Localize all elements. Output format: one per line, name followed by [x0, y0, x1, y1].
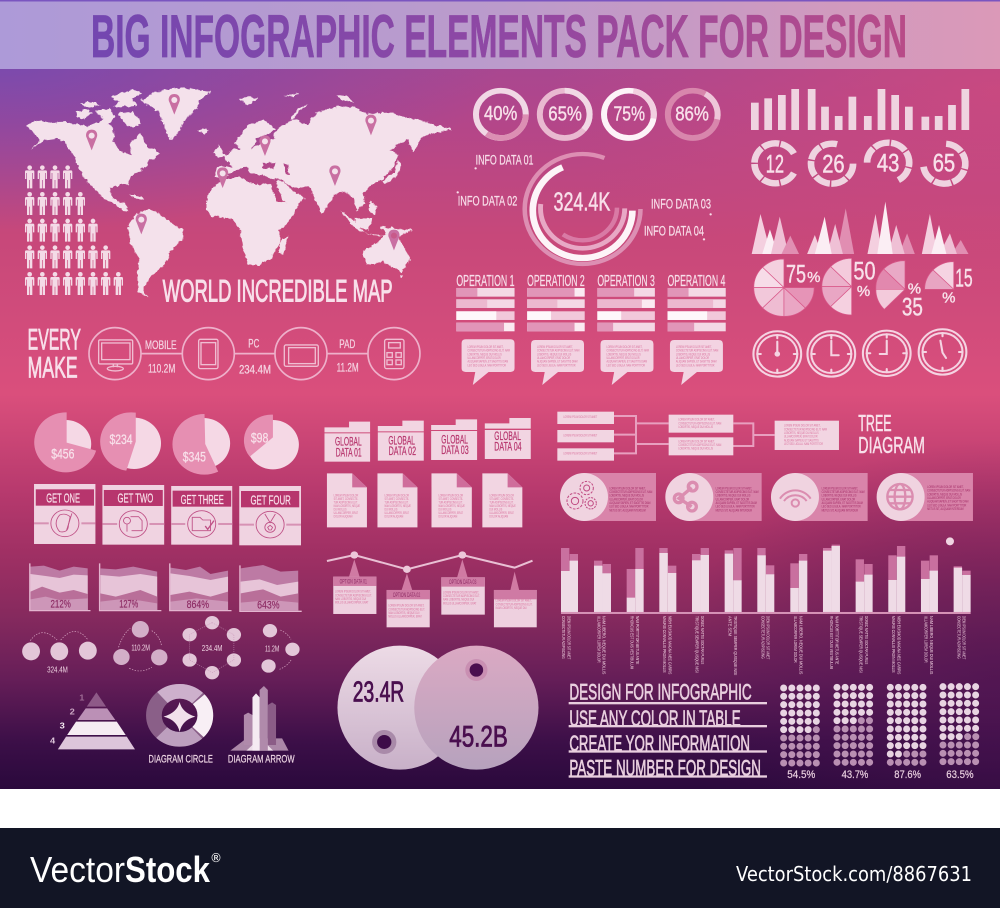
- title band: [0, 0, 1000, 70]
- speech bubbles: LEO SED LIGULA. NAM PORTTITOR: [606, 363, 645, 367]
- option data timeline: OPTION DATA 03: [449, 579, 477, 586]
- arc chart labels: INFO DATA 04: [644, 224, 704, 239]
- percent donuts: [476, 82, 727, 147]
- map location pins: [86, 94, 400, 250]
- gauge values: 43: [877, 148, 899, 178]
- icon feature row: ALIQUAM SAPIEN, ET SAGITTIS DIAM: [609, 500, 651, 505]
- circle groups: 110.2M: [131, 644, 150, 653]
- device connector chain: [89, 328, 420, 380]
- pie percent labels: 15: [955, 265, 973, 292]
- document sheets: TUR ADIPISCING ELIT.: [384, 500, 409, 505]
- icon feature row: LEO SED LIGULA. NAM PORTTITOR: [927, 503, 966, 508]
- speech bubbles: ALIQUAM SAPIEN, ET SAGITTIS DIAM: [537, 359, 578, 364]
- tree diagram: CONSECTETUR ADIPISCING ELIT. NAM: [784, 427, 827, 432]
- rotated bar labels: DONEC MATTIS SOCTAR PURUS: [864, 616, 869, 664]
- option data timeline: MOLLIS ULLAMCORPER, ERAT: [443, 601, 477, 605]
- panel: center top charts: [456, 82, 973, 385]
- pyramid diagram: 4: [50, 736, 55, 745]
- footer image id: VectorStock.com/8867631: [736, 862, 972, 886]
- rotated bar labels: CONSECTETUR ADIPISCING: [760, 616, 765, 659]
- design list: PASTE NUMBER FOR DESIGN: [569, 755, 761, 780]
- every make heading: EVERY: [28, 323, 81, 356]
- icon feature row: ALIQUAM SAPIEN, ET SAGITTIS DIAM: [822, 500, 863, 505]
- dot matrix values: 87.6%: [894, 769, 921, 781]
- document sheets: NAM LOBORTIS, NEQUE: [334, 504, 360, 508]
- document sheets: NAM LOBORTIS, NEQUE: [489, 504, 516, 508]
- global data folders: GLOBAL: [388, 434, 415, 447]
- donut values: 86%: [675, 103, 709, 126]
- option data timeline: [327, 551, 537, 627]
- operation bars: OPERATION 3: [597, 273, 655, 290]
- icon feature row: METUS SIT, ALIQUAM INTERDUM: [716, 508, 752, 513]
- donut values: 75%: [613, 103, 645, 126]
- document sheets: SIT AMET, CONSECTE-: [334, 497, 358, 501]
- tree diagram: ULLAMCORPER, ERAT DOLOR: [784, 434, 818, 439]
- speech bubbles: LOBORTIS, NEQUE DUI MOLLIS: [606, 352, 641, 356]
- icon: share: [674, 482, 697, 511]
- money pie charts: $234: [109, 432, 133, 448]
- get cards: GET FOUR: [250, 493, 291, 507]
- tree diagram: LOREM IPSUM DOLOR SIT AMET,: [678, 417, 715, 422]
- speech bubbles: LOREM IPSUM DOLOR SIT AMET,: [606, 344, 642, 349]
- stacked area charts: 864%: [187, 598, 209, 611]
- document sheets: LOREM IPSUM DOLOR: [384, 493, 409, 498]
- document sheets: DUI MOLLIS: [334, 507, 347, 512]
- panel: lower left set: [30, 412, 537, 627]
- overlapping value circles: [337, 646, 539, 770]
- speech bubbles: CONSECTETUR ADIPISCING ELIT. NAM: [468, 348, 510, 353]
- rotated bar labels: DIEM IPSUM DOLOR SIT AMET: [766, 616, 771, 659]
- diagram circle: [143, 681, 216, 766]
- document sheets: DOLOR ALIQUAM: [489, 514, 509, 519]
- gauge values: 65: [933, 148, 955, 178]
- speech bubbles: CONSECTETUR ADIPISCING ELIT. NAM: [537, 348, 580, 353]
- overlapping value circles: 45.2B: [449, 720, 508, 753]
- icon feature row: LOREM IPSUM DOLOR SIT AMET,: [716, 486, 752, 491]
- icon feature row: LOBORTIS, NEQUE DUI MOLLIS: [927, 492, 962, 497]
- rotated bar labels: DIEM IPSUM DOLOR SIT AMET: [962, 616, 967, 659]
- tree diagram heading: [858, 410, 925, 458]
- speech bubbles: ULLAMCORPER, ERAT DOLOR: [537, 355, 570, 360]
- every make heading: [28, 323, 81, 384]
- segmented pie charts: [754, 258, 954, 316]
- rotated bar labels: TRISTIQUE SEMPER QUISQUE NISI: [733, 616, 738, 675]
- rotated bar labels: NAM PORTTITOR METUS ANTE: [635, 616, 640, 664]
- rotated bar labels: NIBH EUISMOD MAGNA NEC CARPIS: [667, 616, 672, 674]
- operation bars: [456, 273, 726, 331]
- map heading: WORLD INCREDIBLE MAP: [163, 274, 393, 309]
- document sheets: DOLOR ALIQUAM: [334, 514, 353, 519]
- donut values: 65%: [548, 103, 582, 126]
- tree diagram: LOREM IPSUM DOLOR SIT AMET,: [784, 423, 820, 428]
- icon feature row: LOREM IPSUM DOLOR SIT AMET,: [927, 484, 964, 489]
- speech bubbles: CONSECTETUR ADIPISCING ELIT. NAM: [676, 348, 719, 353]
- pie percent labels: [786, 258, 973, 321]
- speech bubbles: LEO SED LIGULA. NAM PORTTITOR: [468, 363, 506, 367]
- tree diagram: LOBORTIS, NEQUE DUI MOLLIS: [678, 424, 713, 429]
- tree diagram: LOBORTIS, NEQUE DUI MOLLIS: [784, 430, 819, 435]
- icon feature row: ALIQUAM SAPIEN, ET SAGITTIS DIAM: [927, 499, 969, 504]
- money pie charts: $98: [251, 431, 268, 446]
- overlapping value circles: 23.4R: [353, 677, 404, 708]
- rotated bar labels: MAURIS CONVALLIS PROIN MOLLIS: [891, 616, 896, 673]
- document sheets: SIT AMET, CONSECTE-: [439, 497, 463, 501]
- footer bar: [0, 828, 1000, 908]
- device labels: 234.4M: [239, 362, 271, 376]
- icon feature row: CONSECTETUR ADIPISCING ELIT. NAM: [822, 489, 865, 494]
- document sheets: NAM LOBORTIS, NEQUE: [439, 504, 465, 508]
- speech bubbles: ALIQUAM SAPIEN, ET SAGITTIS DIAM: [676, 359, 717, 364]
- speech bubbles: [462, 339, 723, 385]
- tree diagram: LOREM IPSUM DOLOR SIT AMET: [563, 451, 597, 456]
- circle groups: 11.2M: [265, 645, 279, 653]
- gauge values: 12: [766, 149, 784, 178]
- global data folders: GLOBAL: [441, 433, 468, 446]
- document sheets: ULLAMCORPER, ERAT: [439, 511, 463, 515]
- design list: CREATE YOR INFORMATION: [569, 731, 750, 756]
- speech bubbles: LEO SED LIGULA. NAM PORTTITOR: [676, 363, 714, 367]
- panel: bottom right design list and dots: [569, 679, 977, 781]
- clocks: [753, 329, 966, 377]
- tree diagram: [557, 410, 925, 461]
- design list: DESIGN FOR INFOGRAPHIC: [569, 679, 752, 704]
- circle groups: 234.4M: [202, 644, 223, 653]
- design list: USE ANY COLOR IN TABLE: [569, 706, 741, 731]
- option data timeline: CONSECTETUR ADIPISCING ELIT.: [443, 593, 480, 598]
- document sheets: DOLOR ALIQUAM: [384, 514, 404, 519]
- circle groups: [22, 616, 300, 679]
- concentric arc chart: [525, 154, 640, 264]
- option data timeline: LOREM IPSUM DOLOR SIT AMET,: [388, 603, 424, 608]
- icon feature row: ULLAMCORPER, ERAT DOLOR: [609, 497, 643, 502]
- every make heading: MAKE: [28, 351, 78, 384]
- option data timeline: CONSECTETUR ADIPISCING ELIT.: [496, 602, 533, 606]
- icon: globe: [887, 484, 913, 509]
- footer logo: ®: [210, 851, 222, 865]
- speech bubbles: LOBORTIS, NEQUE DUI MOLLIS: [537, 352, 571, 356]
- option data timeline: CONSECTETUR ADIPISCING ELIT.: [388, 607, 425, 611]
- option data timeline: LOREM IPSUM DOLOR SIT AMET,: [443, 590, 479, 594]
- pie percent labels: %: [857, 283, 870, 300]
- icon feature row: METUS SIT, ALIQUAM INTERDUM: [822, 508, 858, 513]
- tree diagram: LOREM IPSUM DOLOR SIT AMET: [563, 414, 597, 419]
- speech bubbles: LOBORTIS, NEQUE DUI MOLLIS: [468, 352, 502, 356]
- footer logo: Vector: [30, 849, 125, 890]
- tree diagram: ALIQUAM SAPIEN, ET SAGITTIS: [784, 438, 819, 443]
- speech bubbles: CONSECTETUR ADIPISCING ELIT. NAM: [606, 348, 649, 353]
- diagram arrow: [228, 686, 295, 766]
- dot matrix values: 43.7%: [842, 769, 868, 781]
- get cards: [34, 484, 301, 545]
- speech bubbles: ULLAMCORPER, ERAT DOLOR: [676, 355, 709, 360]
- document sheets: ULLAMCORPER, ERAT: [489, 511, 514, 515]
- icon feature row: LEO SED LIGULA. NAM PORTTITOR: [822, 504, 861, 509]
- stacked bar chart: [561, 537, 971, 675]
- design list: [569, 679, 767, 780]
- rotated bar labels: ULLAMCORPER LOREM DOLOR: [924, 616, 929, 663]
- rotated bar labels: MAURIS CONVALLIS PROIN MOLLIS: [662, 616, 667, 673]
- circle groups: 324.4M: [47, 666, 68, 675]
- operation bars: OPERATION 1: [456, 273, 515, 290]
- speech bubbles: LOBORTIS, NEQUE DUI MOLLIS: [676, 352, 710, 356]
- icon feature row: LEO SED LIGULA. NAM PORTTITOR: [609, 504, 648, 509]
- device icons: [99, 339, 404, 371]
- rotated bar labels: TRISTIQUE SEMPER QUISQUE NISI: [859, 616, 864, 673]
- tree diagram: LEO SED LIGULA. NAM PORTTITOR: [784, 441, 823, 446]
- get cards: GET TWO: [118, 491, 153, 505]
- option data timeline: LOREM IPSUM DOLOR SIT AMET,: [496, 598, 532, 603]
- document sheets: LOREM IPSUM DOLOR: [489, 493, 514, 498]
- icon feature row: CONSECTETUR ADIPISCING ELIT. NAM: [609, 489, 653, 494]
- panel: world map: [25, 87, 452, 309]
- arc chart labels: INFO DATA 02: [458, 194, 517, 210]
- speech bubbles: ULLAMCORPER, ERAT DOLOR: [468, 355, 501, 360]
- document sheets: LOREM IPSUM DOLOR: [334, 493, 358, 498]
- tree diagram heading: TREE: [858, 410, 892, 436]
- rotated bar labels: CONSECTETUR ADIPISCING: [956, 616, 961, 659]
- tree diagram: CONSECTETUR ADIPISCING ELIT. NAM: [678, 421, 722, 426]
- device labels: MOBILE: [145, 338, 177, 352]
- option data timeline: OPTION DATA 01: [340, 579, 367, 586]
- icon feature row: CONSECTETUR ADIPISCING ELIT. NAM: [927, 488, 971, 493]
- icon feature row: LOBORTIS, NEQUE DUI MOLLIS: [822, 493, 856, 498]
- rotated bar labels: NIBH EUISMOD MAGNA NEC CARPIS: [896, 616, 901, 674]
- panel: right middle set: [557, 410, 973, 675]
- bar chart top right: [751, 89, 969, 130]
- rotated bar labels: RHONCUS EST DUIS VESTIBULUM: [630, 616, 635, 669]
- document sheets: DUI MOLLIS: [439, 507, 451, 512]
- arc chart labels: INFO DATA 01: [476, 153, 533, 168]
- option data timeline: NAM LOBORTIS, NEQUE DUI: [443, 597, 474, 602]
- document sheets: TUR ADIPISCING ELIT.: [334, 500, 358, 505]
- stacked area charts: [30, 563, 302, 612]
- rotated bar labels: CONSECTETUR ADIPISCING: [561, 616, 566, 659]
- document sheets: SIT AMET, CONSECTE-: [384, 497, 409, 501]
- speech bubbles: ULLAMCORPER, ERAT DOLOR: [606, 355, 640, 360]
- people pictogram rows: [25, 165, 123, 295]
- pie percent labels: %: [807, 269, 820, 286]
- tree diagram: LOBORTIS, NEQUE DUI MOLLIS: [678, 446, 713, 451]
- diagram arrow: DIAGRAM ARROW: [228, 753, 295, 766]
- diagram circle: DIAGRAM CIRCLE: [149, 753, 213, 766]
- money pie charts: [34, 412, 299, 475]
- get cards: GET THREE: [181, 492, 224, 507]
- rotated bar labels: NAM LIBERO, NEQUE DUI MOLLIS: [602, 616, 607, 674]
- rotated bar labels: ULLAMCORPER LOREM DOLOR: [793, 616, 798, 663]
- icon feature row: LEO SED LIGULA. NAM PORTTITOR: [716, 504, 755, 509]
- device labels: 11.2M: [337, 360, 359, 374]
- icon feature row: LOREM IPSUM DOLOR SIT AMET,: [609, 486, 646, 491]
- arc chart labels: 324.4K: [553, 187, 610, 216]
- icon feature row: ULLAMCORPER, ERAT DOLOR: [927, 495, 961, 500]
- document sheets: LOREM IPSUM DOLOR: [439, 493, 463, 498]
- icon: wifi: [780, 490, 811, 507]
- icon feature row: METUS SIT, ALIQUAM INTERDUM: [927, 506, 964, 511]
- speech bubbles: ALIQUAM SAPIEN, ET SAGITTIS DIAM: [468, 359, 509, 364]
- global data folders: GLOBAL: [335, 435, 362, 448]
- rotated bar labels: DONEC MATTIS SOCTAR PURUS: [700, 616, 705, 664]
- rotated bar labels: NAM LIBERO, NEQUE DUI MOLLIS: [798, 616, 803, 674]
- document sheets: DUI MOLLIS: [384, 507, 397, 512]
- document sheets: DUI MOLLIS: [489, 507, 502, 512]
- device labels: [145, 336, 359, 376]
- dot matrix values: 63.5%: [946, 769, 974, 781]
- pyramid diagram: 2: [70, 707, 75, 716]
- donut values: [484, 102, 709, 126]
- rotated bar labels: ULLAMCORPER LOREM DOLOR: [596, 616, 601, 663]
- footer logo: [30, 849, 222, 890]
- device labels: 110.2M: [148, 362, 175, 376]
- donut values: 40%: [484, 102, 517, 125]
- icon feature row: ALIQUAM SAPIEN, ET SAGITTIS DIAM: [716, 500, 757, 505]
- rotated bar labels: [561, 616, 967, 675]
- operation bars: OPERATION 2: [527, 273, 585, 290]
- tree diagram heading: DIAGRAM: [858, 432, 925, 458]
- pie percent labels: 50: [853, 258, 876, 285]
- dot matrix values: 54.5%: [787, 769, 815, 781]
- global data folders: GLOBAL: [494, 429, 521, 443]
- pie percent labels: %: [908, 281, 921, 298]
- pyramid diagram: [50, 692, 135, 749]
- footer logo: Stock: [125, 849, 211, 890]
- option data timeline: OPTION DATA 02: [393, 592, 421, 599]
- option data timeline: NAM LOBORTIS, NEQUE DUI: [388, 610, 419, 615]
- document sheets: ULLAMCORPER, ERAT: [334, 511, 358, 515]
- panel: every make devices: [28, 323, 420, 384]
- pie percent labels: %: [942, 290, 956, 307]
- speech bubbles: LOREM IPSUM DOLOR SIT AMET,: [676, 344, 712, 349]
- pyramid diagram: 1: [79, 693, 84, 703]
- document sheets: TUR ADIPISCING ELIT.: [439, 500, 463, 505]
- operation bars: OPERATION 4: [667, 273, 726, 290]
- option data timeline: NAM LOBORTIS, NEQUE DUI: [496, 605, 527, 610]
- tree diagram: LOREM IPSUM DOLOR SIT AMET: [563, 433, 597, 438]
- gauge values: 26: [822, 149, 845, 178]
- pie percent labels: 75: [786, 261, 806, 288]
- rotated bar labels: ANTE SEM: [728, 616, 733, 636]
- icon feature row: ULLAMCORPER, ERAT DOLOR: [716, 497, 749, 502]
- icon feature row: METUS SIT, ALIQUAM INTERDUM: [609, 508, 646, 513]
- arc chart labels: [457, 153, 712, 240]
- icon feature row: LOREM IPSUM DOLOR SIT AMET,: [822, 486, 858, 491]
- money pie charts: $456: [51, 447, 74, 463]
- speech bubbles: LEO SED LIGULA. NAM PORTTITOR: [537, 363, 576, 367]
- option data timeline: CONSECTETUR ADIPISCING ELIT.: [335, 593, 372, 597]
- icon: gears: [567, 481, 596, 509]
- document sheets: ULLAMCORPER, ERAT: [384, 511, 409, 515]
- mountain charts: [752, 202, 968, 254]
- world map shape: [27, 87, 452, 297]
- speech bubbles: LOREM IPSUM DOLOR SIT AMET,: [468, 344, 503, 349]
- icon feature row: [560, 473, 973, 521]
- global data folders: DATA 01: [336, 446, 362, 460]
- document sheets: TUR ADIPISCING ELIT.: [489, 500, 514, 505]
- global data folders: DATA 03: [441, 443, 469, 457]
- rotated bar labels: TRISTIQUE SEMPER QUISQUE NISI: [695, 616, 700, 673]
- rotated bar labels: NAM LIBERO, NEQUE DUI MOLLIS: [929, 616, 934, 674]
- money pie charts: $345: [183, 450, 206, 465]
- panel: bottom left set: [22, 616, 539, 770]
- speech bubbles: LOREM IPSUM DOLOR SIT AMET,: [537, 344, 573, 349]
- pyramid diagram: 3: [60, 721, 65, 731]
- icon feature row: LOBORTIS, NEQUE DUI MOLLIS: [609, 493, 644, 498]
- option data timeline: MOLLIS ULLAMCORPER, ERAT: [335, 600, 369, 605]
- pie percent labels: 35: [902, 294, 923, 321]
- option data timeline: MOLLIS ULLAMCORPER, ERAT: [388, 614, 422, 619]
- dot matrix charts: [784, 687, 977, 763]
- option data timeline: LOREM IPSUM DOLOR SIT AMET,: [335, 589, 371, 594]
- tree diagram: CONSECTETUR ADIPISCING ELIT. NAM: [678, 442, 722, 447]
- icon feature row: CONSECTETUR ADIPISCING ELIT. NAM: [716, 489, 759, 494]
- segmented gauges: [747, 136, 967, 191]
- global data folders: [324, 418, 531, 462]
- global data folders: DATA 02: [389, 444, 416, 458]
- global data folders: DATA 04: [494, 440, 522, 454]
- document sheets: SIT AMET, CONSECTE-: [489, 497, 514, 501]
- stacked area charts: 212%: [51, 598, 71, 610]
- stacked area charts: 127%: [119, 598, 138, 610]
- gauge values: [766, 148, 955, 178]
- get cards: GET ONE: [46, 491, 80, 505]
- device labels: PAD: [339, 337, 356, 351]
- document sheets: [327, 473, 522, 527]
- document sheets: DOLOR ALIQUAM: [439, 514, 458, 519]
- icon feature row: ULLAMCORPER, ERAT DOLOR: [822, 497, 855, 502]
- option data timeline: NAM LOBORTIS, NEQUE DUI: [335, 596, 366, 601]
- document sheets: NAM LOBORTIS, NEQUE: [384, 504, 411, 508]
- arc chart labels: INFO DATA 03: [651, 197, 711, 213]
- speech bubbles: ALIQUAM SAPIEN, ET SAGITTIS DIAM: [606, 359, 647, 364]
- dot matrix values: [787, 769, 974, 781]
- rotated bar labels: RHONCUS EST DUIS VESTIBULUM: [829, 616, 834, 669]
- rotated bar labels: NAM PORTTITOR METUS ANTE: [834, 616, 839, 664]
- tree diagram: LOREM IPSUM DOLOR SIT AMET,: [678, 439, 715, 444]
- rotated bar labels: DIEM IPSUM DOLOR SIT AMET: [566, 616, 571, 659]
- icon feature row: LOBORTIS, NEQUE DUI MOLLIS: [716, 493, 750, 498]
- device labels: PC: [248, 336, 260, 350]
- stacked area charts: 643%: [257, 599, 280, 612]
